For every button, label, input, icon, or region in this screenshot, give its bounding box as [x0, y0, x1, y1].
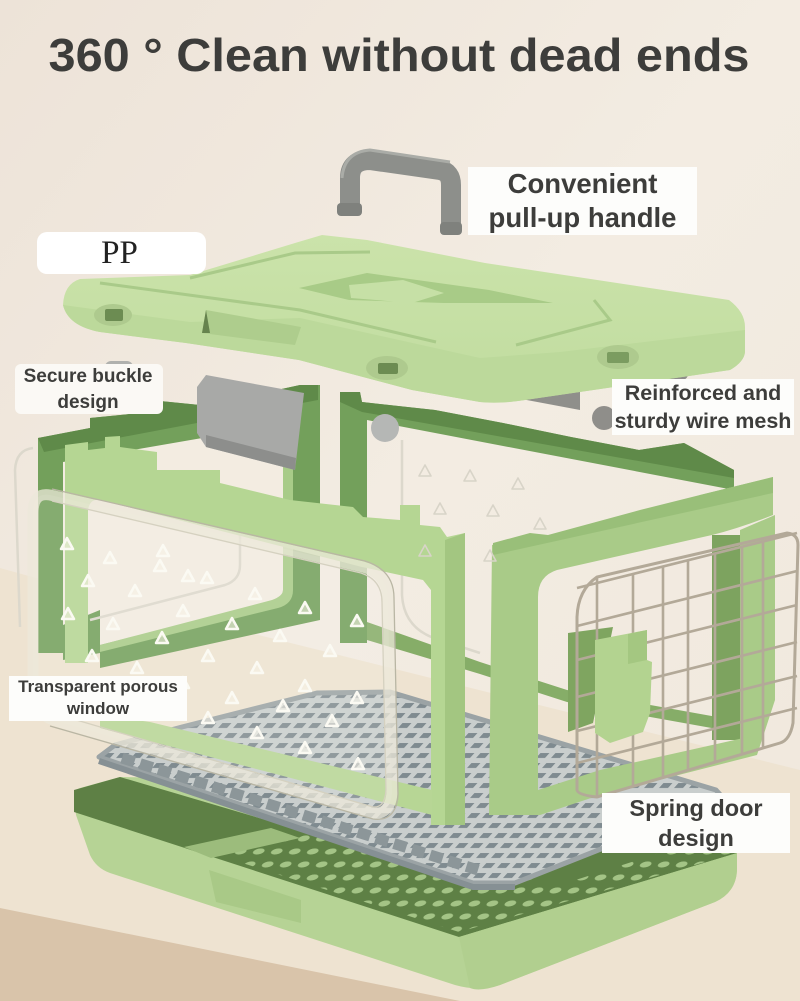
panel: right frame: [489, 477, 775, 815]
label: reinforced and sturdy wire mesh: sturdy wire mesh: [615, 409, 791, 433]
panel: bottom tray: [74, 777, 737, 989]
label: secure buckle design: [15, 364, 163, 414]
panel: lid: [63, 235, 745, 403]
icon: pull-up handle: [337, 150, 462, 235]
label: convenient pull-up handle: [468, 167, 697, 235]
label: PP: [37, 232, 206, 274]
back wall pores: [419, 465, 546, 561]
window pores: [61, 538, 364, 769]
label: PP: PP: [101, 235, 138, 271]
label: spring door design: [602, 793, 790, 853]
label: transparent porous window: [9, 676, 187, 721]
title: 360 ° Clean without dead ends: [48, 29, 750, 81]
icon: spring door wire mesh: [568, 533, 798, 797]
label: spring door design: Spring door: [629, 795, 763, 821]
panel: back right frame: [15, 392, 745, 734]
label: transparent porous window: Transparent porous: [18, 677, 178, 696]
label: reinforced and sturdy wire mesh: Reinforced and: [625, 381, 781, 405]
label: spring door design: design: [658, 825, 734, 851]
label: convenient pull-up handle: pull-up handle: [489, 202, 676, 233]
panel: transparent porous window: [33, 489, 398, 819]
label: convenient pull-up handle: Convenient: [508, 168, 657, 199]
panel: front frame: [65, 436, 465, 825]
icon: grey buckle and pins: [105, 361, 688, 470]
label: reinforced and sturdy wire mesh: [612, 379, 794, 435]
label: transparent porous window: window: [67, 699, 129, 718]
label: secure buckle design: design: [57, 392, 119, 413]
label: secure buckle design: Secure buckle: [24, 366, 152, 387]
panel: back left frame: [38, 385, 320, 668]
panel: grey floor grid: [99, 692, 725, 887]
